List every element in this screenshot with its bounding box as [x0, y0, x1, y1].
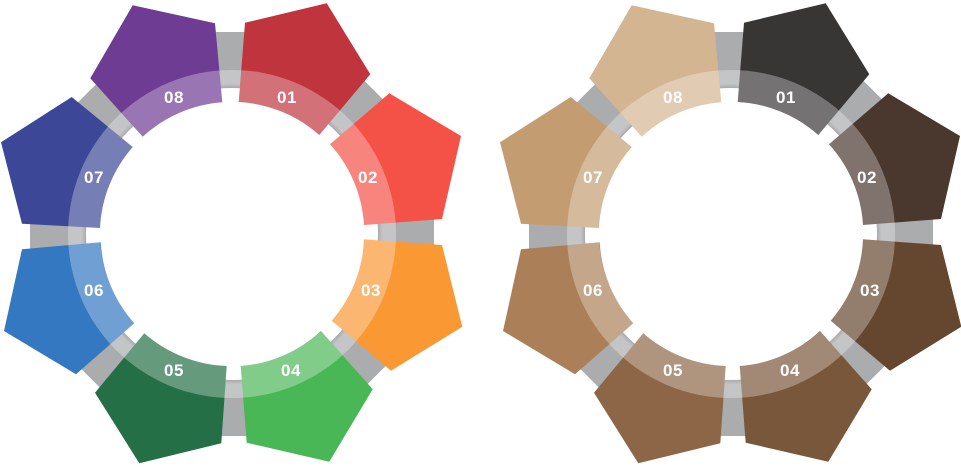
label 05: 05	[663, 361, 683, 380]
segment 03 pentagon	[332, 239, 462, 371]
segment 08 pentagon	[90, 5, 222, 137]
brown wheel	[500, 3, 961, 463]
label 07: 07	[583, 168, 603, 187]
label 03: 03	[361, 281, 381, 300]
label 08: 08	[663, 88, 683, 107]
label 06: 06	[583, 281, 603, 300]
segment 04 pentagon	[241, 331, 373, 462]
translucent inner band	[68, 70, 396, 398]
segment 06 pentagon	[4, 242, 134, 374]
label 01: 01	[776, 88, 796, 107]
segment 03 pentagon	[831, 239, 961, 371]
segment 06 pentagon	[503, 242, 633, 374]
connector bars	[30, 32, 434, 436]
segment 01 pentagon	[738, 3, 869, 135]
colour wheel	[1, 3, 462, 463]
label 06: 06	[84, 281, 104, 300]
segment 08 pentagon	[589, 5, 721, 137]
segment 02 pentagon	[829, 93, 960, 225]
label 03: 03	[860, 281, 880, 300]
label 08: 08	[164, 88, 184, 107]
segment 05 pentagon	[95, 333, 227, 463]
label 02: 02	[857, 168, 877, 187]
label 04: 04	[281, 361, 301, 380]
label 01: 01	[277, 88, 297, 107]
label 02: 02	[358, 168, 378, 187]
segment 04 pentagon	[740, 331, 872, 462]
segment 07 pentagon	[1, 97, 133, 228]
connector bars	[529, 32, 933, 436]
translucent inner band	[567, 70, 895, 398]
segment 05 pentagon	[594, 333, 726, 463]
label 04: 04	[780, 361, 800, 380]
label 07: 07	[84, 168, 104, 187]
segment 02 pentagon	[330, 93, 461, 225]
segment 01 pentagon	[239, 3, 370, 135]
label 05: 05	[164, 361, 184, 380]
segment 07 pentagon	[500, 97, 632, 228]
